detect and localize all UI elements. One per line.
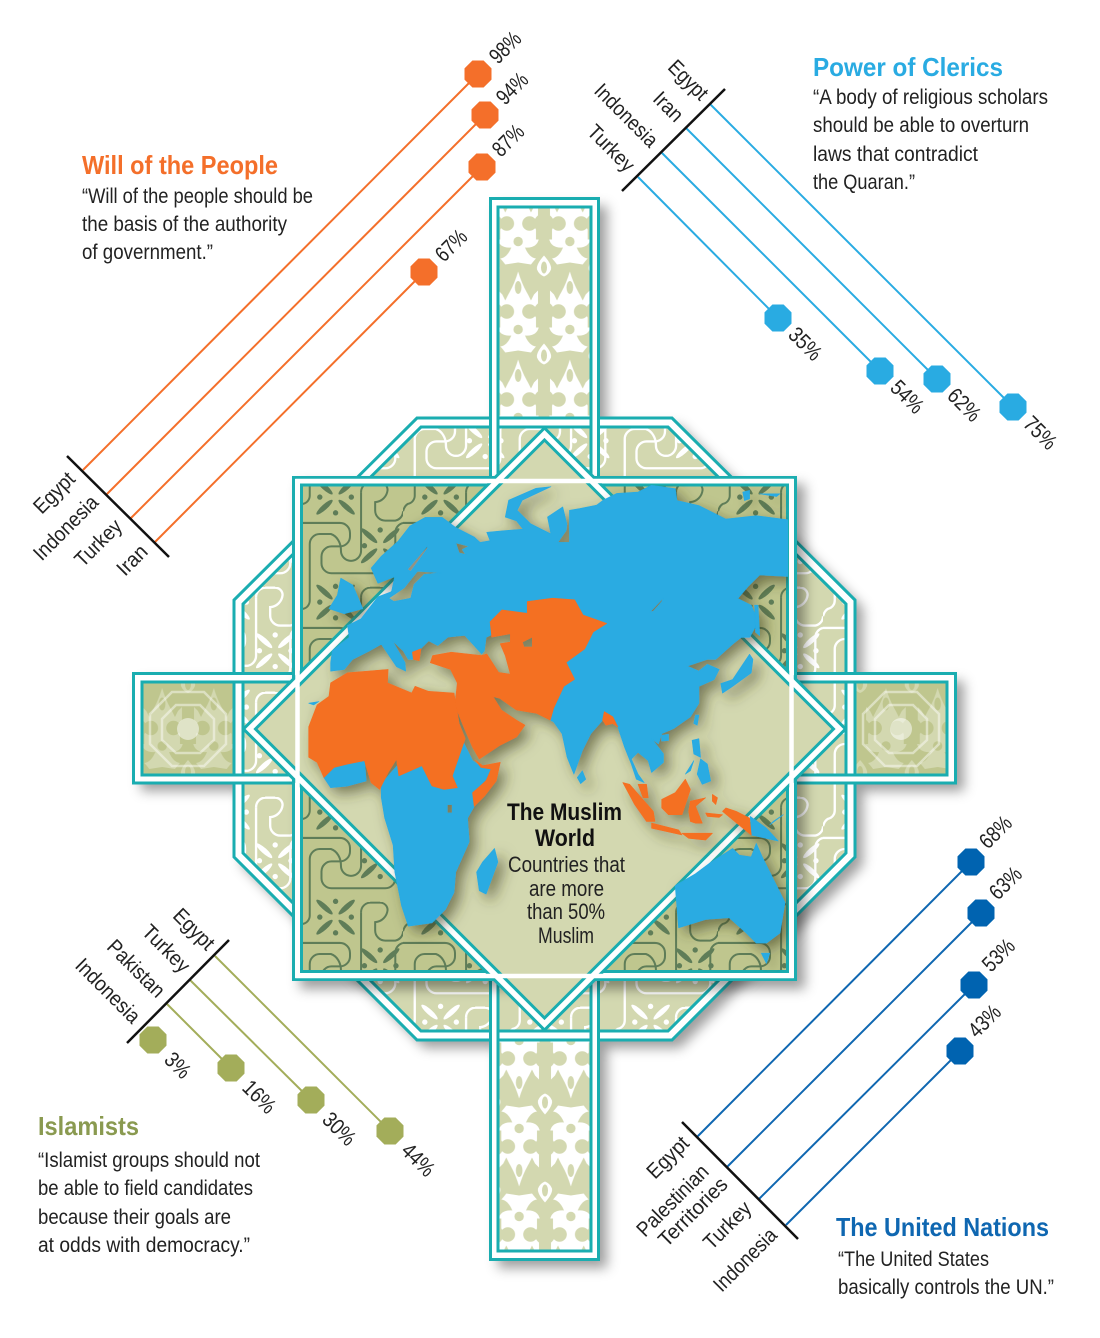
text block: Power of Clerics: should be able to overturn xyxy=(813,114,1029,137)
text block: Islamists: “Islamist groups should not xyxy=(38,1149,260,1172)
text block: Power of Clerics: “A body of religious scholars xyxy=(813,86,1048,109)
chart: Islamists: 30% xyxy=(317,1107,361,1151)
chart: The United Nations: Palestinian xyxy=(632,1160,714,1242)
chart: Will of the People: Indonesia xyxy=(29,491,103,565)
chart: Islamists: Pakistan xyxy=(102,935,169,1002)
text block: Islamists: be able to field candidates xyxy=(38,1177,253,1200)
chart: Power of Clerics: 54% xyxy=(885,375,929,419)
chart: Power of Clerics: Indonesia xyxy=(589,79,662,152)
chart: Power of Clerics: 35% xyxy=(783,322,827,366)
chart: The United Nations: Territories xyxy=(654,1173,732,1252)
chart: The United Nations: 43% xyxy=(963,999,1006,1043)
right bar panel xyxy=(854,682,947,775)
text block: The United Nations: basically controls the UN.” xyxy=(838,1276,1054,1299)
map caption: The Muslim World: are more xyxy=(529,876,604,901)
map caption: The Muslim World: Countries that xyxy=(508,852,625,877)
octagon outlines xyxy=(234,418,855,1040)
chart: Will of the People: Turkey xyxy=(70,515,127,572)
map: blue countries xyxy=(309,485,790,963)
chart: Islamists: 44% xyxy=(396,1138,440,1182)
chart: Islamists: 16% xyxy=(237,1075,281,1119)
text block: Islamists: Islamists xyxy=(38,1111,139,1141)
chart: Will of the People: 87% xyxy=(487,119,529,162)
text block: Power of Clerics: Power of Clerics xyxy=(813,52,1003,82)
bottom bar panel xyxy=(498,1040,591,1251)
chart: Islamists: Indonesia xyxy=(70,954,145,1028)
chart: The United Nations xyxy=(632,810,1027,1297)
map: orange Muslim-majority countries xyxy=(309,598,751,840)
text block: Will of the People xyxy=(82,150,313,264)
map caption: The Muslim World: World xyxy=(535,825,595,852)
chart: Islamists: Turkey xyxy=(137,920,195,978)
text block: The United Nations xyxy=(836,1212,1054,1299)
chart: Power of Clerics: 62% xyxy=(942,383,986,427)
chart: Will of the People: 94% xyxy=(491,67,533,110)
chart: Will of the People xyxy=(29,26,533,581)
chart: The United Nations: 53% xyxy=(977,933,1020,977)
top bar panel xyxy=(498,207,591,418)
text block: Islamists: because their goals are xyxy=(38,1206,231,1229)
ornamental frame: octagon, bars, square and diamond xyxy=(133,198,956,1260)
text block: Islamists: at odds with democracy.” xyxy=(38,1234,250,1257)
chart: Power of Clerics: Egypt xyxy=(663,56,713,105)
chart: Will of the People: 98% xyxy=(484,26,526,69)
chart: The United Nations: Indonesia xyxy=(709,1224,782,1297)
text block: Will of the People: the basis of the authority xyxy=(82,213,287,236)
map caption: The Muslim World: than 50% xyxy=(527,899,605,924)
text block: Power of Clerics: the Quaran.” xyxy=(813,171,915,194)
chart: The United Nations: 63% xyxy=(984,861,1027,905)
bar white bands and outlines xyxy=(133,198,956,1260)
text block: Power of Clerics: laws that contradict xyxy=(813,143,978,166)
chart: Power of Clerics: 75% xyxy=(1018,411,1062,455)
frame shadow base xyxy=(133,198,956,1260)
octagon patterned fill xyxy=(243,427,846,1031)
text block: Will of the People: of government.” xyxy=(82,241,213,264)
text block: The United Nations: “The United States xyxy=(838,1248,989,1271)
left bar panel xyxy=(142,682,235,775)
chart: Will of the People: 67% xyxy=(430,224,472,267)
chart: Power of Clerics: Turkey xyxy=(582,120,639,177)
chart: Will of the People: Iran xyxy=(112,540,153,581)
text block: Islamists xyxy=(38,1111,260,1257)
chart: Islamists xyxy=(70,904,440,1182)
chart: The United Nations: 68% xyxy=(974,810,1017,854)
chart: The United Nations: Turkey xyxy=(699,1197,757,1254)
map caption: The Muslim World: The Muslim xyxy=(507,799,622,826)
chart: Power of Clerics xyxy=(582,56,1062,455)
chart: The United Nations: Egypt xyxy=(642,1132,694,1184)
chart: Will of the People: Egypt xyxy=(29,468,80,519)
text block: Power of Clerics xyxy=(813,52,1048,194)
map caption: The Muslim World xyxy=(507,799,625,948)
text block: The United Nations: The United Nations xyxy=(836,1212,1049,1242)
text block: Will of the People: “Will of the people should be xyxy=(82,185,313,208)
chart: Power of Clerics: Iran xyxy=(648,87,688,127)
map caption: The Muslim World: Muslim xyxy=(538,923,594,948)
chart: Islamists: 3% xyxy=(159,1047,196,1084)
square panel with olive pattern xyxy=(294,478,796,980)
central diamond xyxy=(244,428,846,1030)
text block: Will of the People: Will of the People xyxy=(82,150,278,180)
world map xyxy=(309,485,790,963)
chart: Islamists: Egypt xyxy=(168,904,219,955)
